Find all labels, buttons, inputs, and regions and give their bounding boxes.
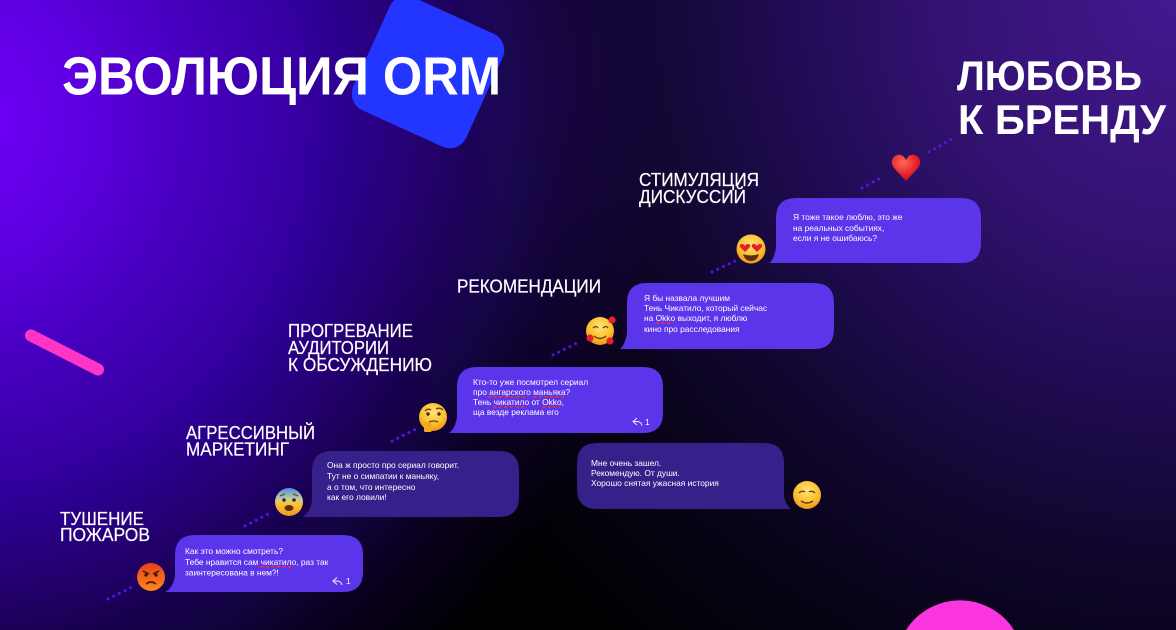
message bubble 3: Кто-то уже посмотрел сериал (473, 377, 588, 387)
label: firefighting: ТУШЕНИЕ (60, 508, 144, 529)
message bubble 1: Как это можно смотреть? (185, 546, 283, 556)
message bubble 2: а о том, что интересно (327, 482, 416, 492)
message bubble 6: Хорошо снятая ужасная история (591, 478, 719, 488)
message bubble 6: Рекомендую. От души. (591, 468, 680, 478)
message bubble 1 (165, 535, 363, 592)
message bubble 6 (577, 443, 791, 509)
title: ЭВОЛЮЦИЯ ORM (62, 46, 501, 106)
decorative blue rounded square (352, 0, 504, 148)
message bubble 2 (302, 451, 519, 517)
label: warming up the audience: АУДИТОРИИ (288, 337, 389, 358)
icon: angry face (137, 563, 165, 591)
message bubble 4: Тень Чикатило, который сейчас (644, 303, 767, 313)
dotted path segments (108, 139, 952, 599)
message bubble 3: про ангарского маньяка? (473, 387, 571, 397)
label: stimulating discussions (639, 169, 759, 207)
message bubble 2: Тут не о симпатии к маньяку, (327, 471, 439, 481)
message bubble 5: если я не ошибаюсь? (793, 233, 877, 243)
message bubble 1: 1 (346, 576, 351, 586)
message bubble 4: на Okko выходит, я люблю (644, 313, 747, 323)
message bubble 5 (769, 198, 981, 263)
message bubble 2: Она ж просто про сериал говорит. (327, 460, 459, 470)
message bubble 3 (449, 367, 663, 433)
message bubble 5: Я тоже такое люблю, это же (793, 212, 903, 222)
label: aggressive marketing: АГРЕССИВНЫЙ (186, 422, 315, 443)
message bubble 4: Я бы назвала лучшим (644, 293, 730, 303)
label: warming up the audience (288, 320, 432, 375)
message bubble 4: кино про расследования (644, 324, 740, 334)
message bubble 1: заинтересована в нем?! (185, 568, 279, 578)
message bubble 3: Тень чикатило от Okko, (473, 397, 564, 407)
message bubble 3: ща везде реклама его (473, 407, 559, 417)
icon: relaxed face (793, 481, 821, 509)
icon: fearful face (275, 488, 303, 516)
heading: brand love: ЛЮБОВЬ (957, 52, 1142, 99)
icon: heart eyes face (736, 234, 766, 264)
icon: thinking face (419, 403, 447, 432)
message bubble 6: Мне очень зашел. (591, 458, 661, 468)
label: aggressive marketing (186, 422, 315, 460)
message bubble 1: Тебе нравится сам чикатило, раз так (185, 557, 329, 567)
message bubble 2: как его ловили! (327, 492, 387, 502)
label: firefighting: ПОЖАРОВ (60, 524, 150, 545)
decorative pink circle (906, 600, 1014, 630)
label: recommendations: РЕКОМЕНДАЦИИ (457, 276, 601, 296)
message bubble 3: 1 (645, 417, 650, 427)
label: stimulating discussions: ДИСКУССИЙ (639, 186, 746, 207)
label: stimulating discussions: СТИМУЛЯЦИЯ (639, 169, 759, 190)
heading: brand love (957, 52, 1167, 143)
message bubble 4 (620, 283, 834, 349)
label: warming up the audience: ПРОГРЕВАНИЕ (288, 320, 413, 341)
label: firefighting (60, 508, 150, 545)
label: aggressive marketing: МАРКЕТИНГ (186, 438, 289, 460)
icon: red heart (892, 155, 920, 181)
heading: brand love: К БРЕНДУ (958, 96, 1167, 143)
decorative pink bar (31, 336, 98, 370)
message bubble 5: на реальных событиях, (793, 223, 884, 233)
label: warming up the audience: К ОБСУЖДЕНИЮ (288, 354, 432, 375)
icon: smiling face with hearts (586, 316, 616, 345)
